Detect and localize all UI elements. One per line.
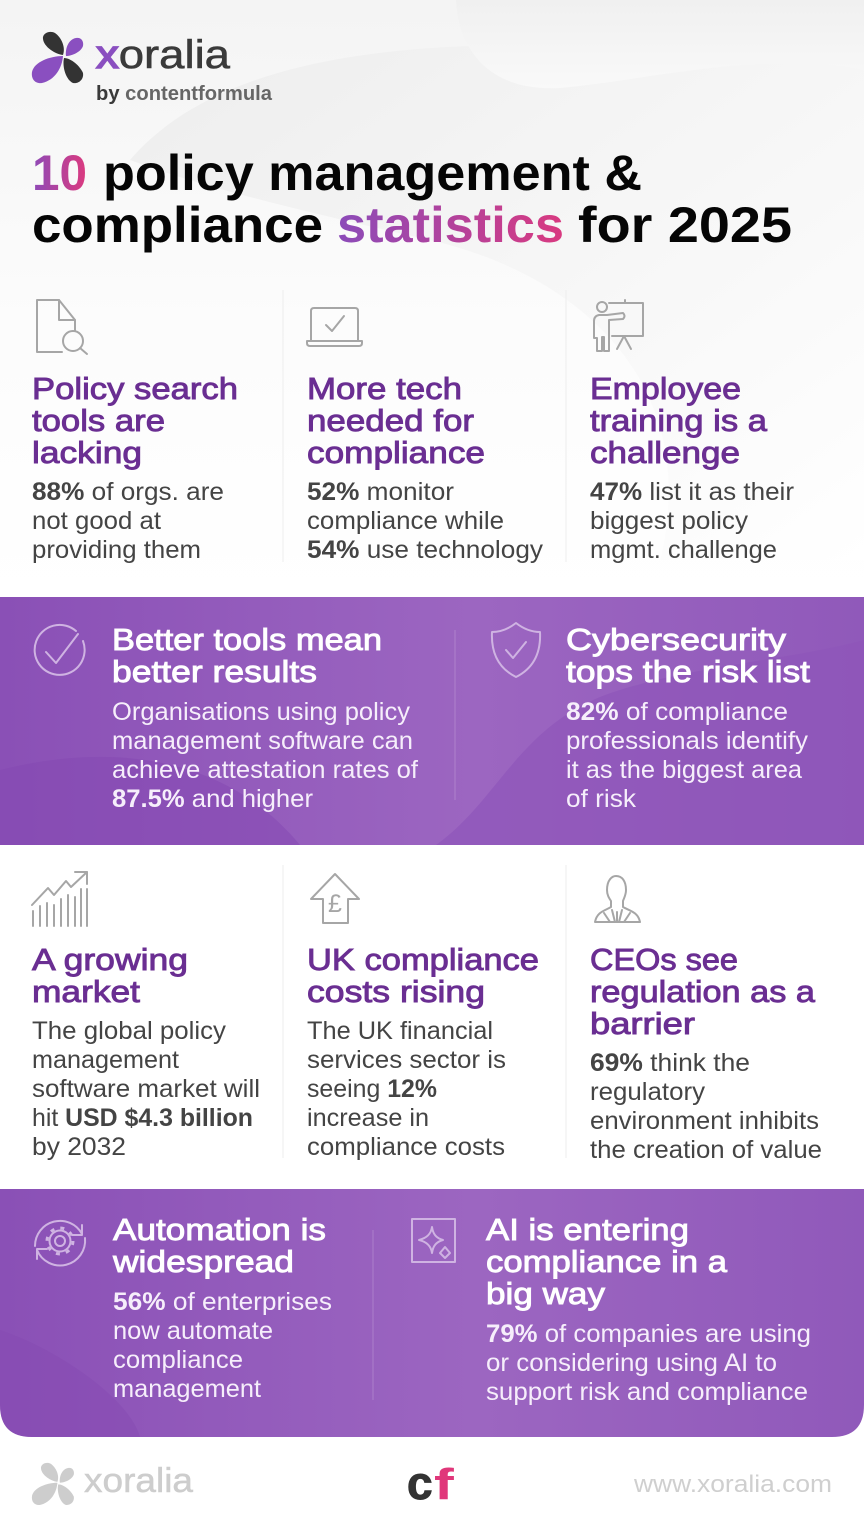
heading: UK compliance costs rising (307, 942, 539, 1009)
heading: better tools mean better results: Better tools mean (112, 622, 382, 657)
stat text: 52% and 54% (307, 478, 544, 564)
stat text: 47% (590, 478, 794, 564)
stat text: 88%: providing them (32, 536, 201, 564)
header background (0, 0, 864, 600)
heading: AI is entering compliance: compliance in a (486, 1244, 728, 1279)
stat text: USD $4.3 billion (32, 1017, 260, 1161)
icon: document search (37, 300, 87, 354)
footer logo: cf (407, 1457, 454, 1509)
heading: policy search tools are lacking (32, 371, 238, 470)
heading: a growing market: market (32, 974, 140, 1009)
logo: xoralia by contentformula: xoralia (96, 33, 231, 77)
heading: automation is widespread: widespread (112, 1244, 294, 1279)
icon: laptop check (307, 308, 362, 346)
heading: a growing market (32, 942, 188, 1009)
footer url: www.xoralia.com (633, 1471, 832, 1498)
heading: UK compliance costs rising: UK compliance (307, 942, 539, 977)
heading: employee training is a challenge: training is a (590, 403, 768, 438)
stat text: USD $4.3 billion: management (32, 1046, 179, 1074)
stat text: 47%: 47% list it as their (590, 478, 794, 506)
stat text: 88%: 88% of orgs. are (32, 478, 224, 506)
heading: AI is entering compliance: big way (486, 1276, 606, 1311)
heading: employee training is a challenge: challenge (590, 435, 740, 470)
heading: better tools mean better results (112, 622, 382, 689)
stat text: USD $4.3 billion: The global policy (32, 1017, 227, 1045)
heading: employee training is a challenge: Employee (590, 371, 741, 406)
icon: business person (595, 876, 640, 922)
stat text: 56%: management (113, 1375, 261, 1403)
heading: AI is entering compliance: AI is entering (486, 1212, 689, 1247)
text: attestation rates: Organisations using policy (112, 698, 411, 726)
heading: automation is widespread: Automation is (113, 1212, 326, 1247)
heading: a growing market: A growing (32, 942, 188, 977)
stat text: 47%: mgmt. challenge (590, 536, 777, 564)
stat text: 79%: 79% of companies are using (486, 1320, 811, 1348)
panel: CEOs see regulation as a barrier (590, 876, 822, 1164)
stat text: 52% and 54%: 52% monitor (307, 478, 454, 506)
stat text: 88%: not good at (32, 507, 161, 535)
heading: more tech needed for compliance: compliance (307, 435, 485, 470)
stat text: 12%: services sector is (307, 1046, 506, 1074)
heading: cybersecurity tops the risk list: tops the risk list (566, 654, 810, 689)
stat text: 82%: it as the biggest area (566, 756, 802, 784)
heading: cybersecurity tops the risk list: Cybersecurity (566, 622, 787, 657)
heading: employee training is a challenge (590, 371, 768, 470)
text: attestation rates: management software can (112, 727, 413, 755)
logo: xoralia by contentformula (32, 32, 273, 105)
panel: employee training (590, 300, 794, 564)
stat text: 82%: professionals identify (566, 727, 809, 755)
footer logo: xoralia: xoralia (84, 1462, 193, 1500)
text: attestation rates (112, 698, 418, 813)
stat text: 56%: 56% of enterprises (113, 1288, 332, 1316)
text: attestation rates: achieve attestation rates of (112, 756, 418, 784)
heading: policy search tools are lacking: Policy search (32, 371, 238, 406)
icon: gear cycle (35, 1221, 85, 1266)
stat text: 69% (590, 1049, 822, 1164)
icon: AI sparkle (412, 1219, 455, 1262)
stat text: 12% (307, 1017, 506, 1161)
stat text: 82%: 82% of compliance (566, 698, 788, 726)
icon: house arrow with pound: £ (328, 890, 342, 918)
stat text: 52% and 54%: compliance while (307, 507, 504, 535)
title: for 2025 (578, 197, 792, 253)
panel: policy search tools (32, 300, 238, 564)
icon: check circle (35, 625, 85, 675)
stat text: USD $4.3 billion: by 2032 (32, 1133, 126, 1161)
heading: CEOs see regulation as a barrier: barrier (590, 1006, 695, 1041)
stat text: 47%: biggest policy (590, 507, 749, 535)
stat text: 56%: compliance (113, 1346, 243, 1374)
title: 10 (32, 145, 87, 201)
panel: growing market (32, 872, 260, 1161)
heading: cybersecurity tops the risk list (566, 622, 810, 689)
panel: purple band two (0, 1189, 864, 1437)
title: statistics (337, 197, 564, 253)
heading: CEOs see regulation as a barrier: CEOs see (590, 942, 738, 977)
title: policy management & (103, 145, 642, 201)
stat text: 12%: The UK financial (307, 1017, 493, 1045)
panel: UK compliance costs (307, 874, 539, 1161)
text: attestation rates: 87.5% and higher (112, 785, 313, 813)
heading: UK compliance costs rising: costs rising (307, 974, 485, 1009)
stat text: USD $4.3 billion: hit USD $4.3 billion (32, 1104, 253, 1132)
heading: AI is entering compliance (486, 1212, 728, 1311)
stat text: USD $4.3 billion: software market will (32, 1075, 260, 1103)
heading: more tech needed for compliance (307, 371, 485, 470)
stat text: 12%: increase in (307, 1104, 429, 1132)
stat text: 79%: or considering using AI to (486, 1349, 777, 1377)
title: compliance (32, 197, 323, 253)
footer logo: xoralia (32, 1462, 193, 1505)
heading: more tech needed for compliance: needed for (307, 403, 474, 438)
stat text: 79%: support risk and compliance (486, 1378, 808, 1406)
stat text: 88% (32, 478, 224, 564)
stat text: 12%: seeing 12% (307, 1075, 437, 1103)
heading: more tech needed for compliance: More tech (307, 371, 462, 406)
panel: purple band one (0, 597, 864, 845)
stat text: 82% (566, 698, 809, 813)
stat text: 69%: environment inhibits (590, 1107, 819, 1135)
stat text: 82%: of risk (566, 785, 637, 813)
stat text: 69%: 69% think the (590, 1049, 750, 1077)
stat text: 69%: regulatory (590, 1078, 706, 1106)
icon: presenter at board (594, 300, 643, 351)
heading: CEOs see regulation as a barrier: regulation as a (590, 974, 816, 1009)
footer logo: cf: c (407, 1457, 433, 1509)
heading: automation is widespread (112, 1212, 326, 1279)
stat text: 12%: compliance costs (307, 1133, 505, 1161)
icon: house arrow with pound (311, 874, 359, 923)
stat text: 69%: the creation of value (590, 1136, 822, 1164)
logo: xoralia by contentformula: by contentformula (96, 83, 273, 105)
stat text: 52% and 54%: 54% use technology (307, 536, 544, 564)
heading: policy search tools are lacking: tools are (32, 403, 165, 438)
panel: more tech needed (307, 308, 544, 564)
heading: better tools mean better results: better results (112, 654, 317, 689)
heading: CEOs see regulation as a barrier (590, 942, 816, 1041)
heading: policy search tools are lacking: lacking (32, 435, 142, 470)
stat text: 56% (113, 1288, 332, 1403)
footer logo: cf: f (434, 1460, 454, 1509)
icon: shield check (492, 623, 540, 677)
title (32, 145, 792, 253)
stat text: 79% (486, 1320, 811, 1406)
icon: rising bar chart (32, 872, 87, 926)
stat text: 56%: now automate (113, 1317, 273, 1345)
